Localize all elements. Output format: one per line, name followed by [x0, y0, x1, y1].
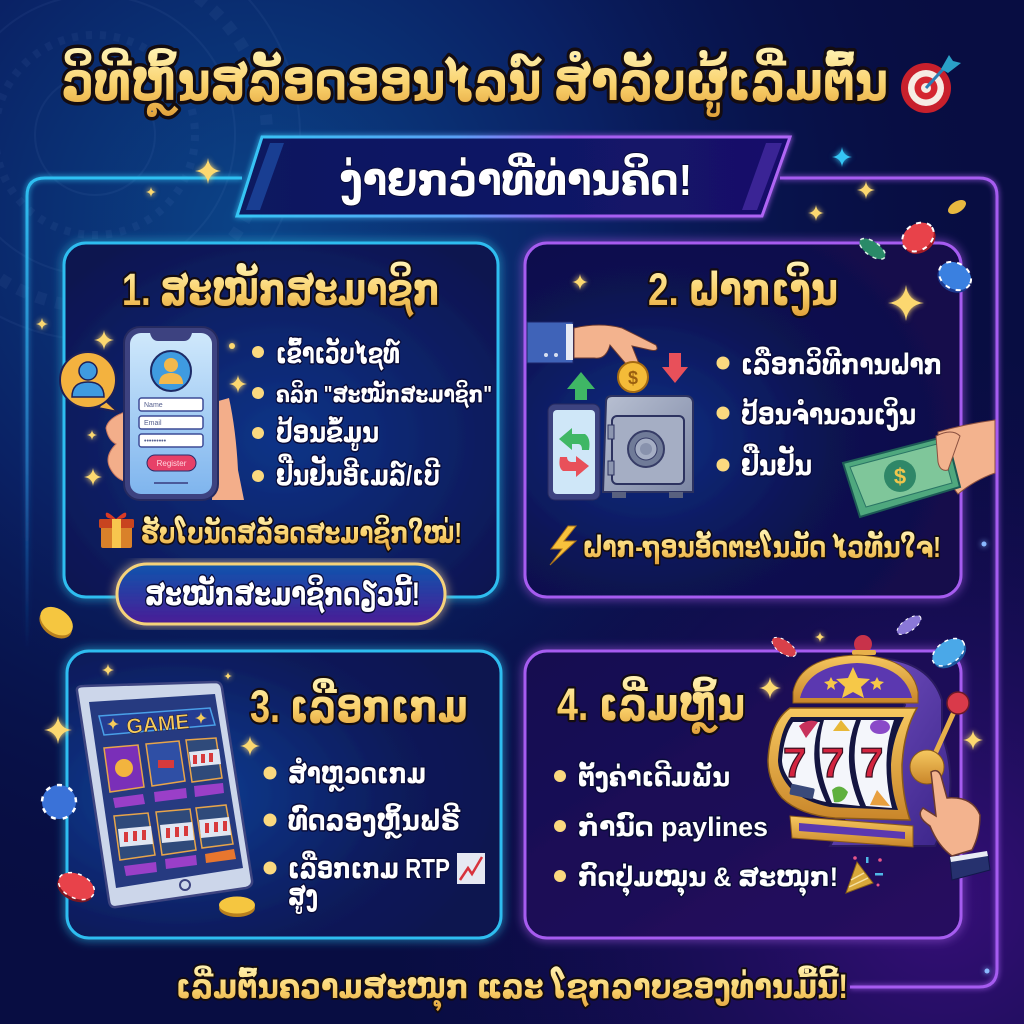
panel: step 4 start playing [525, 635, 990, 938]
icon: hand pulling lever [920, 771, 990, 880]
banner [237, 137, 790, 216]
bullet list 2 [716, 346, 942, 481]
icon: red chip top [897, 217, 941, 260]
footer tagline: ເລີ່ມຕົ້ນຄວາມສະໜຸກ ແລະ ໂຊກລາບຂອງທ່ານມື້ນີ້! [176, 965, 848, 1011]
icon: slot machine: 7 [783, 739, 806, 786]
bullet list 3: ທົດລອງຫຼິ້ນຟຣີ [288, 802, 461, 839]
icon: blue chip slot [927, 633, 971, 674]
bullet list 1 [252, 336, 492, 491]
icon: tablet with game grid [77, 682, 252, 907]
bullet list 2: ເລືອກວິທີການຝາກ [741, 346, 942, 380]
icon: green and red arrows [567, 353, 688, 400]
banner text: ງ່າຍກວ່າທີ່ທ່ານຄິດ! [340, 152, 692, 206]
bullet list 1: ປ້ອນຂໍ້ມູນ [276, 415, 379, 451]
bullet list 4 [554, 760, 838, 897]
panel: step 1 register [60, 243, 498, 624]
panel: step 2 deposit [525, 243, 961, 597]
bullet list 1: ຄລິກ "ສະໝັກສະມາຊິກ" [276, 380, 492, 409]
icon: gold coin left [33, 601, 79, 644]
icon: slot machine [768, 635, 969, 847]
bullet list 4: ກົດປຸ່ມໝຸນ & ສະໜຸກ! [578, 861, 838, 897]
title: ວິທີຫຼິ້ນສລັອດອອນໄລນ໌ ສຳລັບຜູ້ເລີ່ມຕົ້ນ [62, 48, 888, 117]
bullet list 1: ເຂົ້າເວັບໄຊທ໌ [276, 336, 401, 371]
heading 2: 2. ຝາກເງິນ [648, 262, 838, 316]
icon: hand dropping coin [527, 322, 657, 392]
icon: bolt [550, 526, 576, 565]
icon: green chip [856, 234, 889, 263]
heading 1: 1. ສະໝັກສະມາຊິກ [122, 262, 440, 318]
signup button [117, 564, 445, 624]
icon: tablet with game grid: GAME [126, 710, 190, 739]
heading 3: 3. ເລືອກເກມ [250, 679, 468, 732]
bullet list 4: ກຳນົດ paylines [578, 811, 768, 842]
icon: safe [603, 396, 693, 498]
chips and coins [33, 197, 976, 908]
outer frame [27, 178, 997, 987]
bullet list 3: ສຳຫຼວດເກມ [288, 757, 426, 792]
icon: slot machine: 7 [860, 739, 883, 786]
icon: gold coin top [946, 197, 968, 217]
bullet list 2: ປ້ອນຈຳນວນເງິນ [741, 396, 916, 431]
icon: gift [99, 513, 134, 548]
bonus line: ຮັບໂບນັດສລັອດສະມາຊິກໃໝ່! [141, 515, 462, 551]
panel: step 3 choose game [67, 651, 501, 938]
speed line: ຝາກ-ຖອນອັດຕະໂນມັດ ໄວທັນໃຈ! [583, 530, 941, 564]
icon: user bubble [60, 352, 118, 412]
icon: red chip left [53, 867, 99, 908]
bullet list 3: ສູງ [288, 880, 318, 914]
icon: party popper [846, 856, 883, 893]
icon: hand holding phone: ••••••••• [144, 438, 167, 445]
icon: hand holding phone: Email [144, 420, 162, 427]
heading 4: 4. ເລີ່ມຫຼິ້ນ [557, 677, 745, 734]
icon: hand holding phone: Name [144, 402, 163, 409]
bullet list 2: ຢືນຢັນ [741, 443, 812, 481]
icon: coin [219, 896, 255, 917]
icon: hand holding phone: Register [157, 459, 187, 468]
bullet list 3 [264, 757, 461, 914]
sparkles [36, 147, 990, 974]
icon: hand with banknote [843, 420, 995, 517]
icon: hand dropping coin: $ [628, 368, 638, 388]
icon: blue chip left [37, 780, 81, 824]
bullet list 1: ຢືນຢັນອີເມລ໌/ເບີ [276, 453, 441, 491]
icon: hand with banknote: $ [894, 464, 906, 489]
icon: chart emoji [457, 853, 485, 884]
icon: hand holding phone [106, 327, 244, 500]
icon: blue chip right [932, 256, 976, 298]
icon: target with dart [901, 55, 961, 113]
icon: purple chip [894, 612, 924, 638]
bullet list 4: ຕັ້ງຄ່າເດີມພັນ [578, 760, 730, 793]
sparkles [84, 330, 247, 486]
button label: ສະໝັກສະມາຊິກດຽວນີ້! [145, 574, 420, 614]
icon: slot machine: 7 [821, 739, 844, 786]
icon: red chip slot [769, 634, 799, 660]
bullet list 3: ເລືອກເກມ RTP [288, 850, 450, 884]
icon: phone transfer [548, 404, 600, 500]
